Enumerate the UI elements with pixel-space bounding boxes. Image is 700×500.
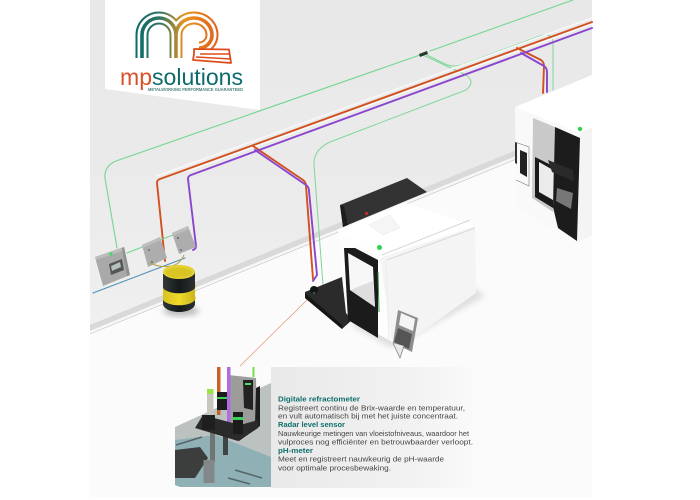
barrel <box>163 265 199 316</box>
bracket side <box>236 386 260 441</box>
logo tagline: METALWORKING PERFORMANCE GUARANTEED <box>148 87 243 92</box>
machine 2 left face <box>515 107 580 242</box>
wall <box>90 0 592 330</box>
green sensor cable: machine 1 <box>314 56 471 285</box>
machine 2 side vent <box>520 150 527 177</box>
control box 2 <box>142 237 167 267</box>
orange tube <box>217 367 220 415</box>
laser callout line <box>240 296 311 366</box>
display unit <box>243 380 253 410</box>
orange pipe <box>157 22 592 279</box>
logo mark <box>142 18 231 63</box>
refractometer description: Registreert continu de Brix-waarde en temperatuur, <box>278 403 465 412</box>
refractometer <box>207 391 214 416</box>
heading: digital refractometer: Digitale refractometer <box>278 395 360 404</box>
machine right face <box>380 226 476 342</box>
logo panel <box>105 0 260 110</box>
floor <box>90 128 592 497</box>
sensor probes <box>210 432 215 462</box>
machine 2 keypad <box>556 188 573 209</box>
radar description: Nauwkeurige metingen van vloeistofniveaus, waardoor het <box>278 429 469 438</box>
heading: pH meter: pH-meter <box>278 446 313 455</box>
purple pipe <box>188 28 592 281</box>
machine 2 lamp <box>578 127 582 131</box>
wall shadow under pipes <box>157 18 592 176</box>
machine 2 <box>515 75 592 242</box>
yellow hoses <box>150 255 184 267</box>
radar description <box>278 429 473 447</box>
pipes <box>93 0 592 366</box>
green sensor cable: top <box>105 0 573 248</box>
sensor illustration <box>175 367 271 487</box>
back plate <box>228 375 257 428</box>
tank glass <box>175 383 271 487</box>
machine 2 grey door <box>532 118 555 212</box>
machine top <box>338 203 475 258</box>
logo wordmark: mpsolutions <box>120 64 243 90</box>
radar description: vulproces nog efficiënter en betrouwbaarder verloopt. <box>278 438 473 447</box>
pH description: voor optimale procesbewaking. <box>278 463 391 472</box>
text panel <box>271 367 480 488</box>
baseboard <box>90 119 592 331</box>
blue line <box>93 258 185 293</box>
machine 2 window <box>535 157 553 208</box>
machine 2 right face <box>578 128 592 242</box>
machine top vent <box>369 215 400 235</box>
tank dark inner wall <box>175 447 208 478</box>
floor shadow <box>350 285 485 348</box>
pH description: Meet en registreert nauwkeurig de pH-waarde <box>278 455 444 464</box>
green link between boxes <box>127 235 173 253</box>
control box 3 <box>172 226 196 254</box>
refractometer description: en vult automatisch bij met het juiste concentraat. <box>278 412 458 421</box>
radar sensor <box>217 392 227 410</box>
machine left face <box>338 230 392 342</box>
purple tube <box>227 367 230 432</box>
green sensor cable: machine 2 <box>427 35 553 90</box>
sensor on base <box>310 286 318 294</box>
green tube <box>252 367 254 377</box>
machine control panel <box>393 310 418 358</box>
machine 1 <box>305 178 485 358</box>
machine 2 top <box>515 75 592 133</box>
pH meter <box>233 412 243 434</box>
machine door <box>344 248 378 338</box>
machine base plate <box>305 277 352 329</box>
water streaks <box>176 437 262 484</box>
machine rear unit <box>340 178 427 227</box>
control box 1 <box>95 247 130 286</box>
refractometer description <box>278 403 465 421</box>
bracket base plate <box>195 415 258 441</box>
inline green device <box>419 51 428 57</box>
machine 2 black panel <box>553 127 580 241</box>
tank water <box>175 435 271 487</box>
pH description <box>278 455 444 472</box>
machine green lamp <box>377 245 382 250</box>
heading: radar level sensor: Radar level sensor <box>278 420 345 429</box>
machine window <box>348 253 375 307</box>
